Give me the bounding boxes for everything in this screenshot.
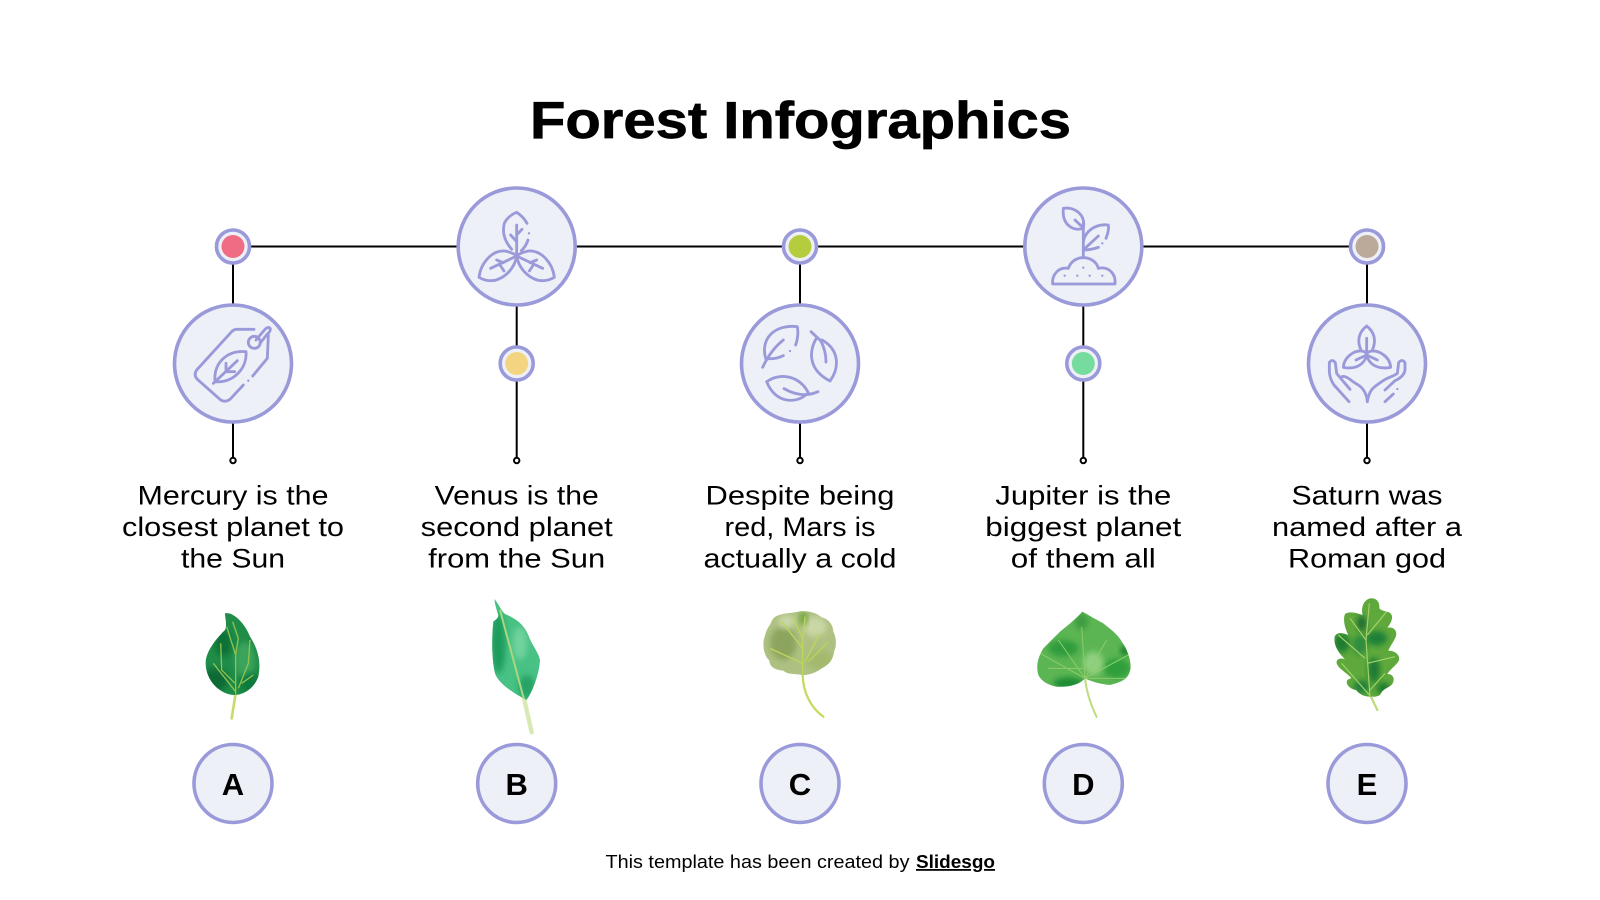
- description B: Venus is the: [435, 480, 599, 510]
- description E: Roman god: [1288, 544, 1446, 574]
- badge C: [761, 744, 839, 822]
- badge D: D: [1072, 767, 1094, 802]
- leaf D watercolor: [1033, 610, 1133, 717]
- description B: [421, 480, 613, 574]
- description A: closest planet to: [122, 512, 344, 542]
- description E: Saturn was: [1292, 480, 1442, 510]
- leaf A watercolor: [206, 613, 260, 720]
- marker dot B yellow: [500, 347, 533, 380]
- badge A: [194, 744, 272, 822]
- footer credit: Slidesgo: [916, 852, 995, 872]
- icon: hands holding leaves: [1308, 305, 1426, 422]
- leaf B watercolor: [492, 599, 540, 734]
- description D: Jupiter is the: [995, 480, 1171, 510]
- description B: second planet: [421, 512, 613, 542]
- title: Forest Infographics: [530, 92, 1071, 150]
- description A: [122, 480, 344, 574]
- marker dot E taupe: [1350, 230, 1384, 263]
- description A: Mercury is the: [138, 480, 328, 510]
- description E: [1272, 480, 1463, 574]
- description C: [704, 480, 896, 574]
- description C: Despite being: [706, 480, 894, 510]
- badge B: B: [506, 767, 528, 802]
- badge B: [478, 744, 556, 822]
- description E: named after a: [1272, 512, 1463, 542]
- timeline connector lines: [230, 246, 1370, 463]
- badge E: E: [1357, 767, 1377, 802]
- description A: the Sun: [181, 544, 285, 574]
- description D: biggest planet: [985, 512, 1182, 542]
- badge E: [1328, 744, 1406, 822]
- description C: actually a cold: [704, 544, 896, 574]
- description D: of them all: [1011, 544, 1156, 574]
- icon: three leaves: [458, 188, 575, 305]
- icon: sprout in soil: [1025, 188, 1142, 305]
- description C: red, Mars is: [724, 512, 876, 542]
- badge C: C: [789, 767, 811, 802]
- icon: leaf price tag: [174, 305, 292, 422]
- marker dot D mint: [1067, 347, 1100, 380]
- footer credit: This template has been created by: [606, 852, 910, 872]
- marker dot C green: [784, 230, 816, 263]
- badge D: [1044, 744, 1122, 822]
- description D: [985, 480, 1182, 574]
- badge A: A: [222, 767, 244, 802]
- marker dot A red: [216, 230, 250, 263]
- icon: falling leaves cycle: [742, 305, 858, 422]
- description B: from the Sun: [428, 544, 605, 574]
- leaf C watercolor: [760, 610, 840, 717]
- leaf E watercolor: [1332, 595, 1402, 710]
